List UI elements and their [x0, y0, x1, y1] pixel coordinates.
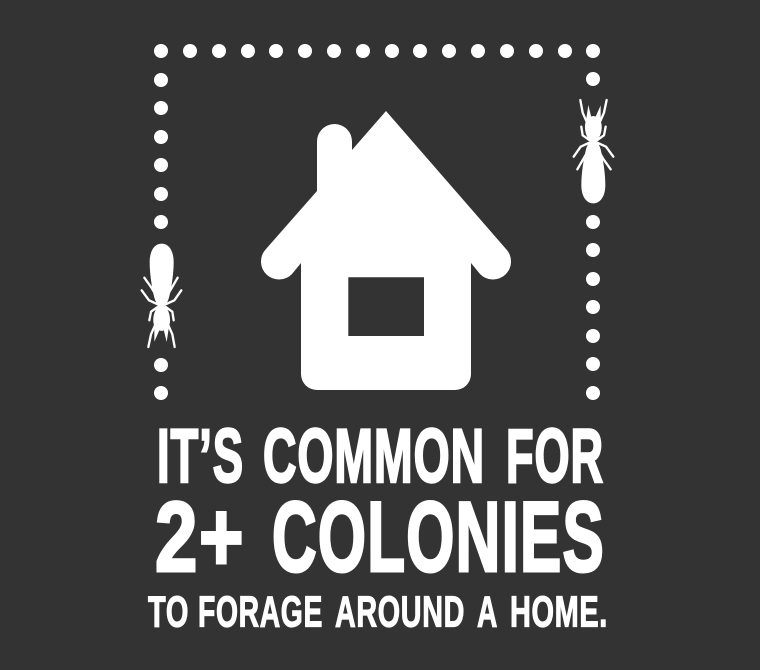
line 3: HOME.	[510, 587, 608, 636]
dotted path border	[154, 44, 600, 400]
line 3: FORAGE	[198, 587, 323, 636]
line 1: COMMON	[263, 414, 485, 499]
line 1: FOR	[506, 414, 604, 499]
line 3	[148, 587, 608, 636]
line 2: 2+	[155, 481, 245, 592]
line 2	[155, 481, 605, 592]
heading text	[148, 414, 608, 636]
icon: termite left	[142, 244, 181, 347]
icon: termite right	[574, 100, 613, 203]
line 3: A	[477, 587, 498, 636]
line 1: IT’S	[157, 414, 244, 499]
line 3: TO	[148, 587, 189, 636]
icon: house	[261, 111, 511, 390]
line 3: AROUND	[335, 587, 465, 636]
